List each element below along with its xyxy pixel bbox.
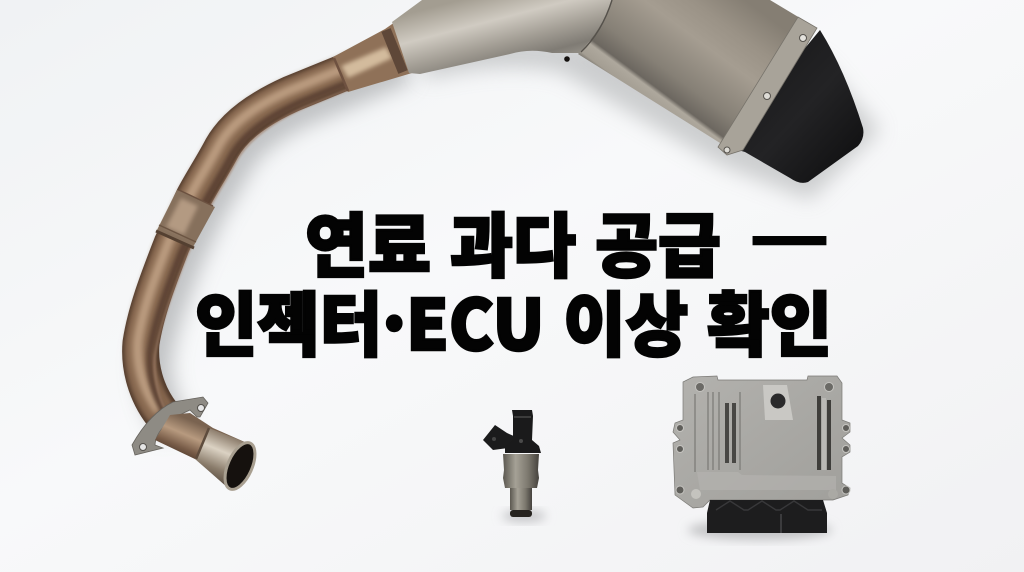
pipe collar upper <box>333 22 412 92</box>
muffler neck <box>392 0 612 74</box>
ECU connector <box>707 500 827 533</box>
title dash: — <box>749 181 830 282</box>
ECU screws <box>691 489 701 499</box>
ECU step panel <box>697 472 836 490</box>
title line 1: 연료 과다 공급 <box>305 191 721 292</box>
injector connector <box>483 425 516 450</box>
muffler band <box>718 17 817 155</box>
pipe end <box>195 428 247 487</box>
ECU housing <box>673 376 850 508</box>
ECU mounting holes <box>696 382 704 392</box>
pipe collar middle <box>157 190 215 247</box>
flange <box>132 397 208 455</box>
muffler black tip <box>724 30 863 183</box>
ECU fins left <box>695 392 740 472</box>
pipe lower section <box>155 413 247 487</box>
ECU fins right <box>817 396 821 470</box>
exhaust pipe <box>132 22 412 494</box>
injector body <box>503 454 539 488</box>
title line 2: 인젝터·ECU 이상 확인 <box>195 270 832 371</box>
title <box>195 181 832 371</box>
ECU boss <box>763 385 793 420</box>
muffler <box>392 0 880 200</box>
injector <box>483 410 546 522</box>
muffler body <box>578 0 800 148</box>
ECU <box>673 376 850 540</box>
